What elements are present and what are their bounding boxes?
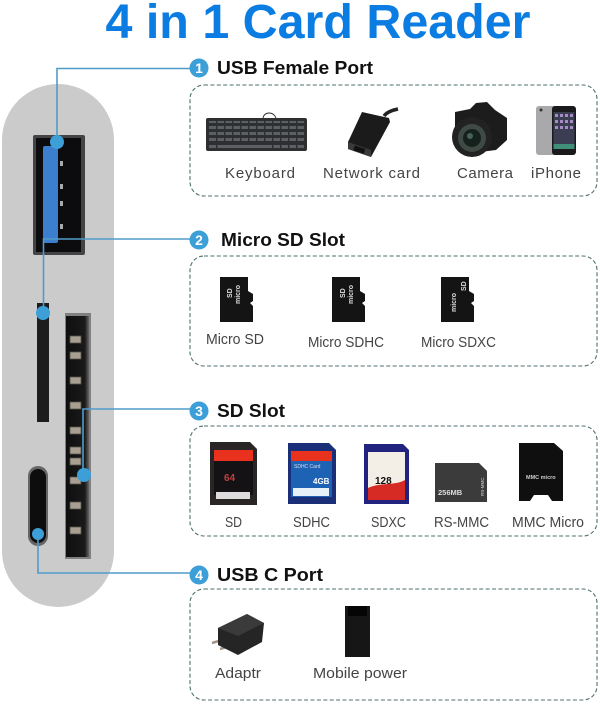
icon: SD card	[210, 442, 257, 505]
icon: micro SDXC card: SD	[461, 281, 468, 291]
label: RS-MMC	[434, 514, 489, 531]
panel frame	[190, 589, 597, 700]
label: Camera	[457, 165, 514, 182]
micro SD slot	[37, 303, 49, 422]
USB female port	[33, 135, 85, 255]
number badge 1	[190, 58, 208, 78]
section 2: Micro SD Slot	[190, 229, 597, 366]
icon: mobile power	[345, 606, 370, 657]
icon: SDXC card	[364, 444, 409, 504]
leader line 4	[32, 528, 190, 573]
heading: SD Slot	[217, 400, 285, 421]
label: Micro SDXC	[421, 334, 496, 351]
icon: RS-MMC card: RS-MMC	[480, 477, 485, 496]
card reader device	[2, 84, 114, 607]
icon: micro SDHC card	[332, 277, 365, 322]
icon: adapter	[212, 614, 264, 655]
icon: SDHC card: SDHC Card	[294, 464, 321, 470]
number badge 4	[190, 566, 208, 584]
icon: micro SD card: micro	[235, 285, 242, 304]
icon: MMC micro card	[519, 443, 563, 501]
label: Micro SD	[206, 331, 264, 348]
label: Mobile power	[313, 665, 407, 682]
section 1: USB Female Port	[190, 57, 597, 196]
label: Network card	[323, 165, 420, 182]
icon: keyboard	[206, 113, 307, 151]
SD slot	[65, 313, 91, 559]
heading: USB Female Port	[217, 57, 373, 78]
icon: micro SDXC card: micro	[451, 293, 458, 312]
panel frame	[190, 426, 597, 536]
label: SDXC	[371, 514, 406, 531]
icon: micro SDXC card	[441, 277, 474, 322]
icon: RS-MMC card: 256MB	[438, 488, 463, 497]
label: Keyboard	[225, 165, 295, 182]
label: MMC Micro	[512, 514, 584, 531]
panel frame	[190, 85, 597, 196]
label: iPhone	[531, 165, 581, 182]
label: SDHC	[293, 514, 330, 531]
icon: MMC micro card: MMC micro	[526, 475, 556, 481]
icon: micro SD card: SD	[227, 288, 234, 298]
label: SD	[225, 514, 242, 531]
number badge 3	[190, 402, 208, 420]
number badge 4: 4	[195, 567, 203, 583]
icon: micro SD card	[220, 277, 253, 322]
heading: USB C Port	[217, 564, 323, 585]
icon: SD card: 64	[224, 473, 236, 484]
leader line 1	[50, 68, 190, 149]
section 4: USB C Port	[190, 564, 597, 700]
icon: micro SDHC card: micro	[348, 285, 355, 304]
icon: micro SDHC card: SD	[340, 288, 347, 298]
icon: network card	[348, 109, 398, 157]
panel frame	[190, 256, 597, 366]
icon: camera	[452, 102, 507, 157]
number badge 2	[190, 230, 208, 250]
number badge 3: 3	[195, 403, 203, 419]
icon: iPhone	[536, 106, 576, 155]
icon: RS-MMC card	[435, 463, 487, 502]
label: Micro SDHC	[308, 334, 384, 351]
number badge 2: 2	[195, 232, 203, 248]
icon: SDXC card: 128	[375, 476, 392, 487]
heading: Micro SD Slot	[221, 229, 345, 250]
leader line 2	[36, 239, 190, 320]
number badge 1: 1	[195, 60, 203, 76]
leader line 3	[77, 409, 190, 482]
icon: SDHC card: 4GB	[313, 477, 330, 486]
USB C port	[28, 466, 48, 546]
label: Adaptr	[215, 665, 261, 682]
icon: SDHC card	[288, 443, 336, 504]
section 3: SD Slot	[190, 400, 597, 536]
